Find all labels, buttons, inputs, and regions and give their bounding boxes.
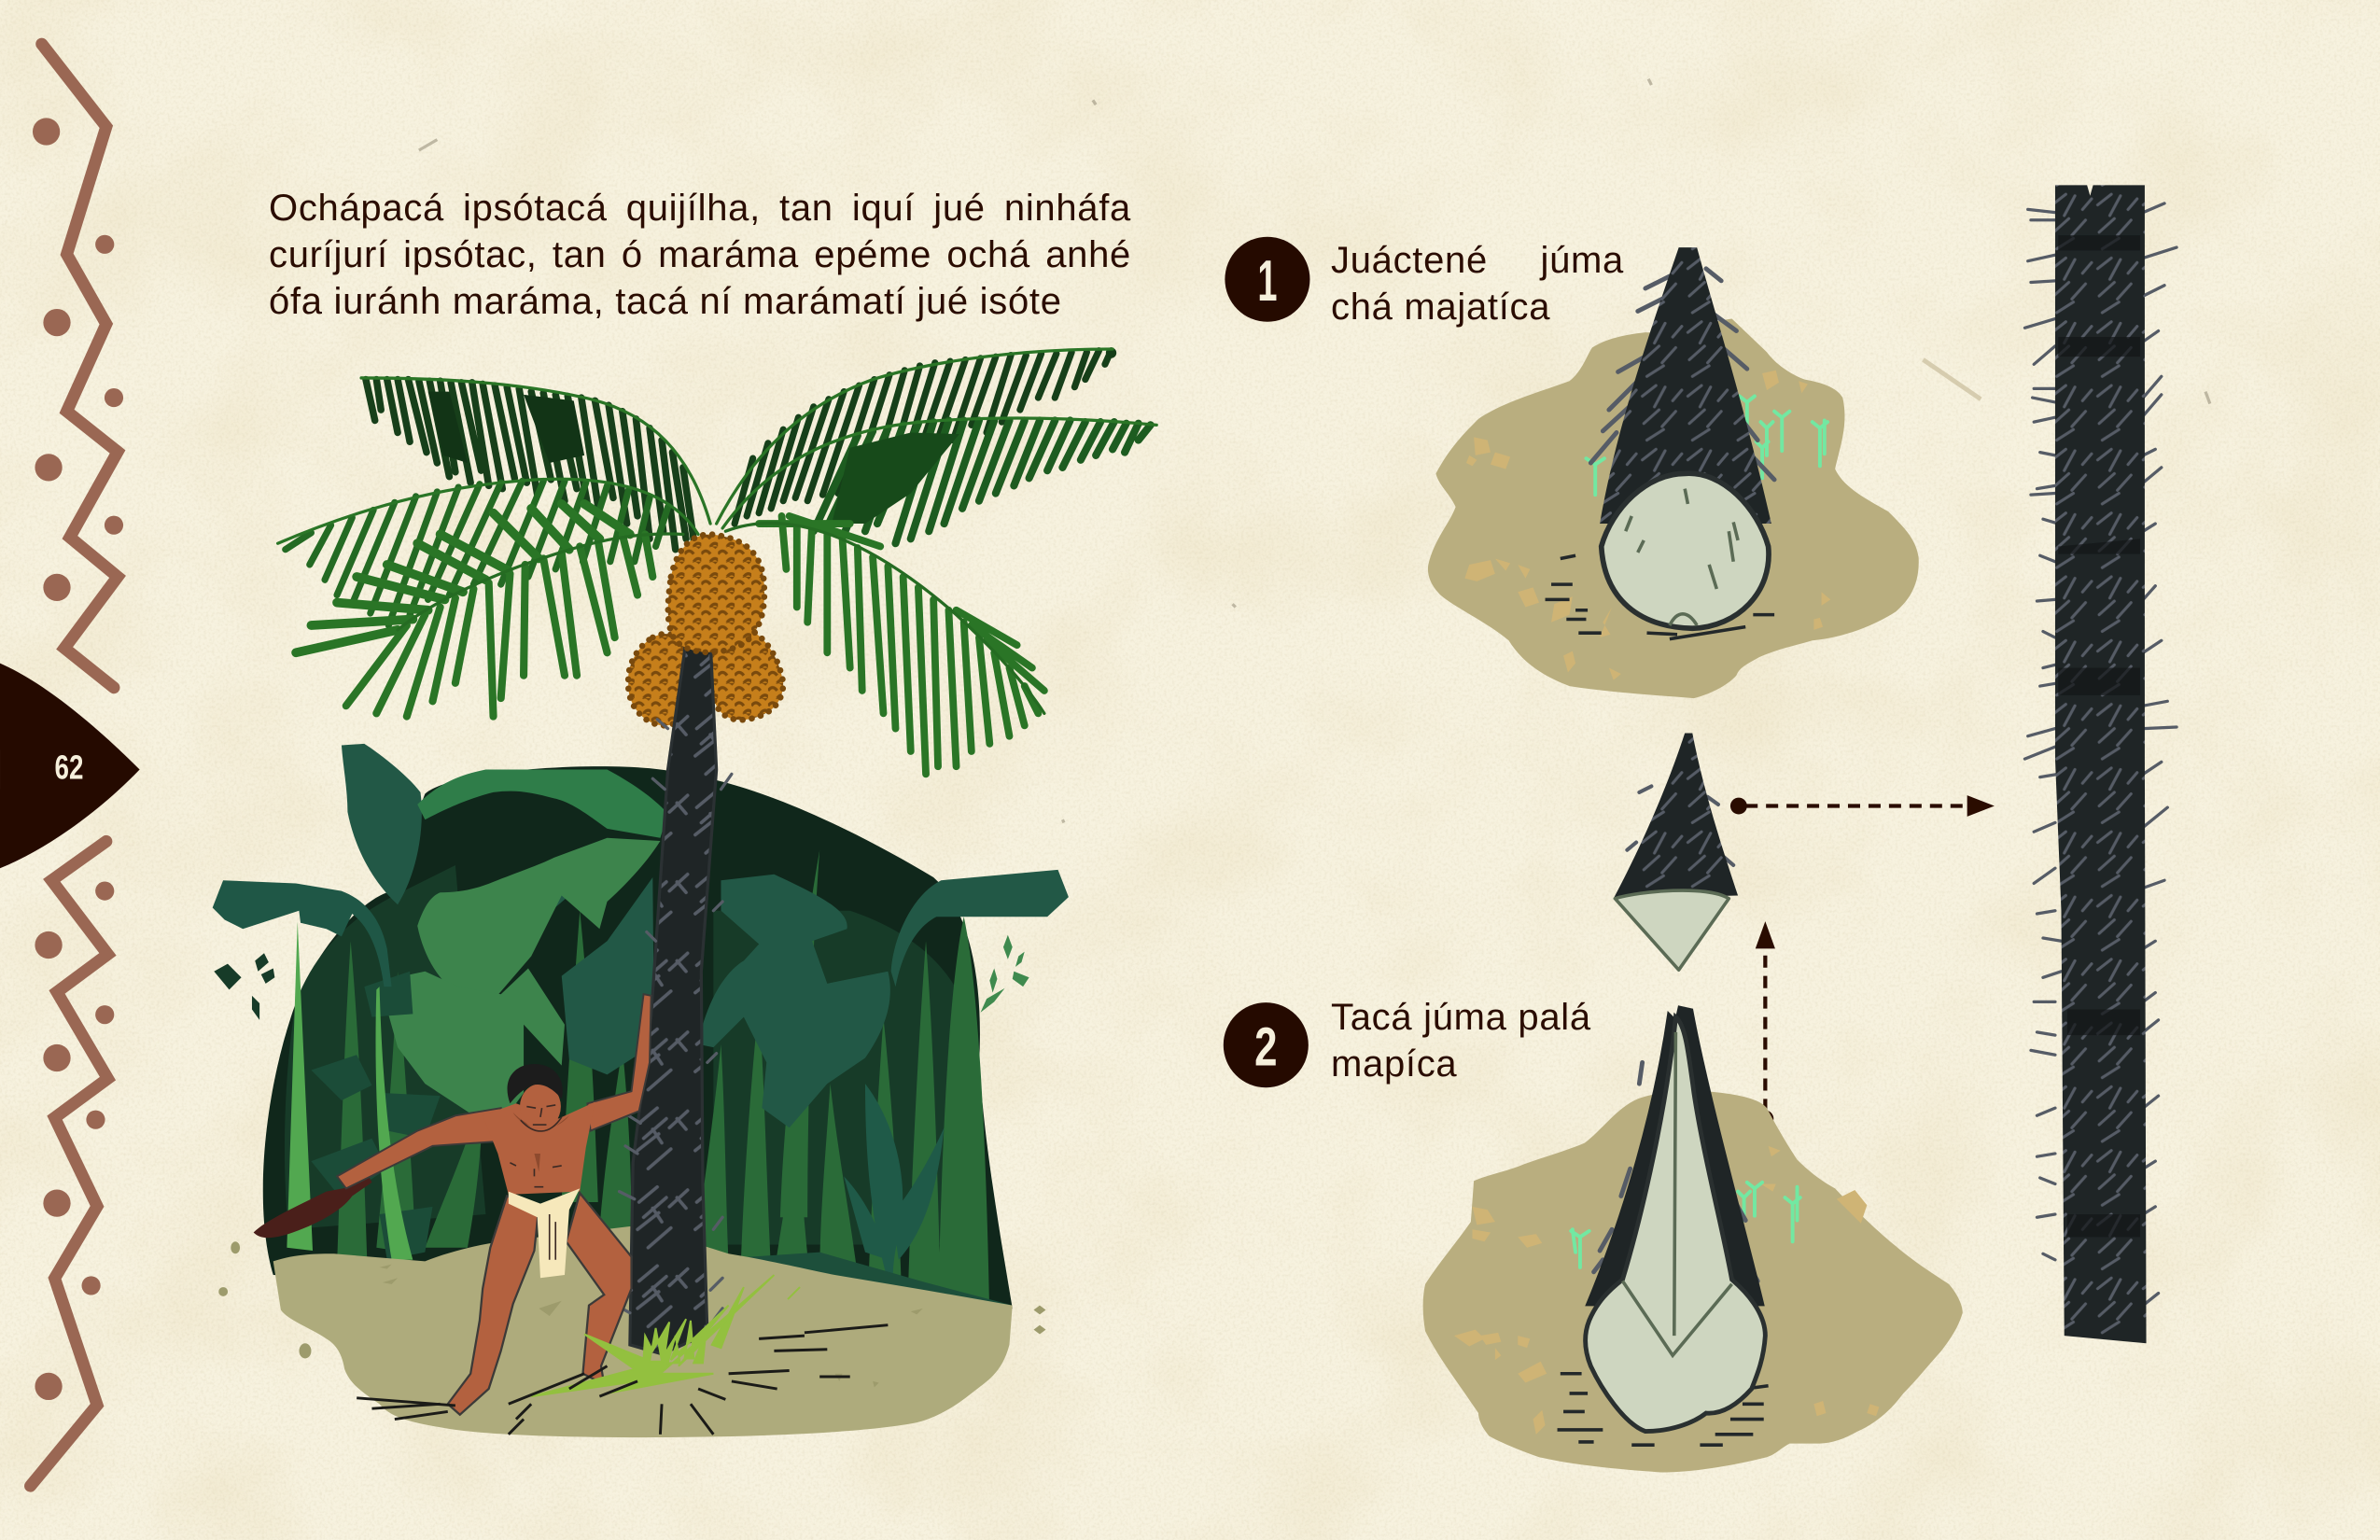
mound 1: [1428, 319, 1919, 698]
low teal blades: [844, 1084, 945, 1306]
dark bands: [2058, 235, 2140, 1237]
root scratches: [357, 1325, 888, 1435]
teal right leaves: [698, 875, 890, 1127]
step 2 label: [1331, 997, 1591, 1085]
arrow horizontal: [1730, 795, 1995, 817]
light green stem left: [287, 921, 413, 1260]
pale split interior: [1586, 1017, 1765, 1432]
dark cone: [1600, 247, 1771, 524]
beam body: [2055, 185, 2147, 1343]
loincloth: [509, 1188, 580, 1278]
cone whiskers: [1590, 269, 1774, 480]
left arm: [337, 1108, 501, 1188]
frond mid left: [278, 479, 698, 625]
frond lower right: [725, 516, 1044, 774]
ground specks: [218, 1241, 1046, 1387]
body lines: [510, 1105, 562, 1260]
floating leaves right: [981, 935, 1029, 1013]
frond upper right: [717, 347, 1116, 524]
step 2 badge: 2: [1254, 1017, 1278, 1078]
jungle scene: [213, 347, 1156, 1437]
step 1 label: [1331, 240, 1624, 328]
step 1 label: chá majatíca: [1331, 287, 1550, 328]
banana leaf left: [213, 880, 392, 987]
machete: [254, 1176, 371, 1238]
page number tab: [0, 664, 140, 868]
step 1 badge: 1: [1257, 249, 1278, 314]
banana leaf right: [891, 870, 1069, 987]
green lower leaf: [383, 969, 565, 1120]
chest shadow: [513, 1113, 569, 1171]
teal banana leaf upper left: [342, 744, 422, 904]
torso: [483, 1102, 595, 1195]
mound with split trunk: [1423, 1006, 1963, 1472]
floating leaves left: [214, 953, 274, 1020]
frond mid right: [722, 418, 1156, 543]
mound 2: [1423, 1091, 1963, 1472]
lower fruit clusters: [628, 625, 783, 725]
ground scratches: [1558, 1374, 1769, 1445]
large green leaf top: [417, 770, 668, 838]
arrow vertical: [1756, 921, 1775, 1127]
paragraph text: ófa iuránh maráma, tacá ní marámatí jué isóte: [269, 281, 1062, 322]
step 2 label: Tacá júma palá: [1331, 997, 1591, 1038]
decorative zigzag border bottom: [31, 841, 114, 1486]
step 1 badge: [1225, 237, 1309, 322]
frond upper left: [361, 378, 710, 550]
pale diamond: [1615, 890, 1729, 970]
seedlings: [1586, 396, 1827, 495]
dark tip: [1614, 733, 1738, 899]
paragraph text: [269, 188, 1131, 322]
seedlings: [1571, 1183, 1800, 1267]
pale cut ellipse: [1602, 473, 1769, 628]
paragraph text: curíjurí ipsótac, tan ó maráma epéme ochá anhé: [269, 234, 1131, 275]
tip whiskers: [1627, 786, 1733, 865]
background stems: [337, 850, 989, 1323]
paragraph text: Ochápacá ipsótacá quijílha, tan iquí jué ninháfa: [269, 188, 1131, 229]
ellipse marks: [1626, 489, 1738, 625]
ochre patches: [1454, 1146, 1879, 1435]
frond lower left: [296, 504, 683, 717]
right arm: [587, 994, 651, 1131]
step 2 label: mapíca: [1331, 1043, 1457, 1085]
teal central leaves: [509, 858, 654, 1074]
side spikes: [2024, 203, 2177, 1306]
palm fronds: [278, 347, 1156, 774]
mound with cone: [1428, 247, 1919, 698]
hair: [508, 1064, 563, 1103]
ground: [273, 1226, 1013, 1437]
face: [520, 1084, 561, 1129]
small dark leaves: [311, 972, 441, 1260]
grass tuft: [531, 1275, 800, 1396]
cut-off tip piece: [1614, 733, 1738, 970]
green central leaf: [417, 838, 660, 1001]
step 1 label: Juáctené júma: [1331, 240, 1624, 281]
step 2 badge: [1224, 1002, 1309, 1087]
dark shell: [1586, 1006, 1764, 1306]
trunk whiskers: [1594, 1062, 1757, 1281]
page number tab: 62: [55, 749, 83, 786]
left leg: [448, 1196, 539, 1415]
ochre patches: [1464, 371, 1830, 680]
decorative zigzag border top: [33, 44, 123, 688]
teal band on ground edge: [706, 1253, 1013, 1309]
mid forest shading: [285, 865, 987, 1245]
V cut line: [1622, 1032, 1732, 1355]
man with machete: [254, 994, 651, 1415]
long beam: [2024, 185, 2177, 1343]
upper fruit cluster: [668, 534, 764, 652]
palm trunk: [613, 640, 732, 1354]
ground scratches: [1546, 555, 1774, 639]
right leg: [567, 1193, 632, 1384]
dark forest backdrop: [263, 766, 1013, 1309]
